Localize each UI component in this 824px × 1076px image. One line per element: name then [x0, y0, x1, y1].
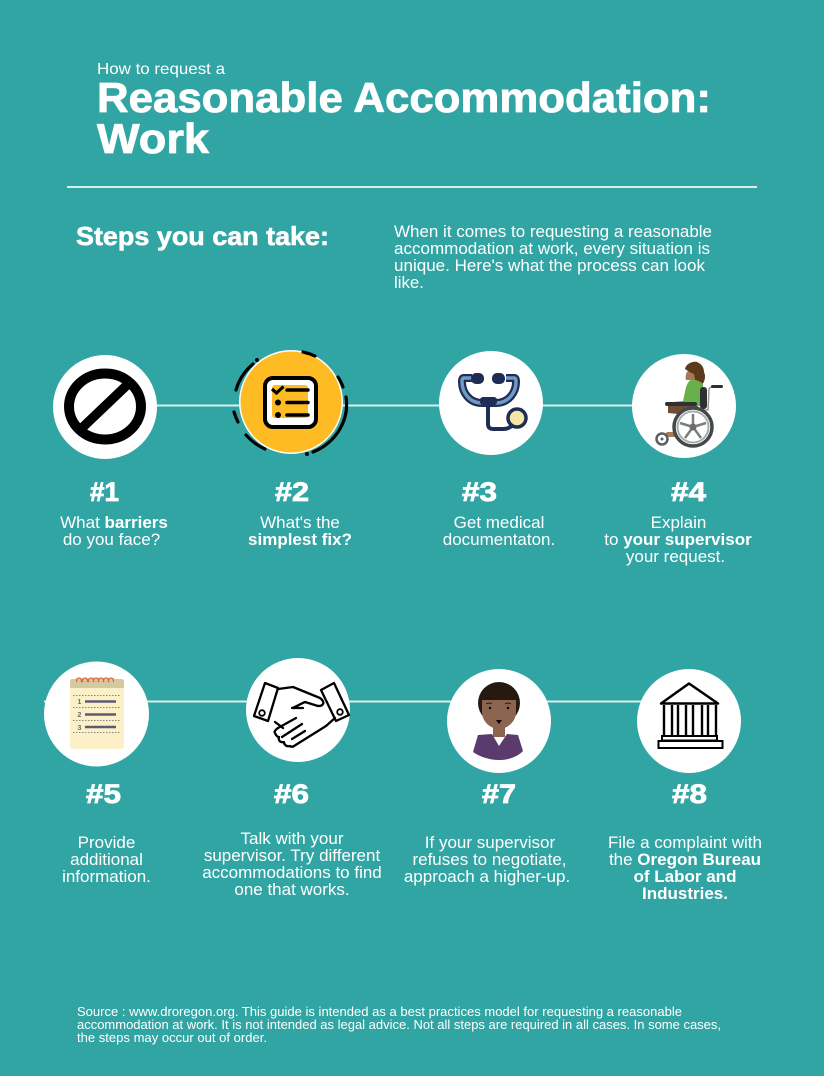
text: step 8	[608, 833, 762, 903]
text: step 4: Explain	[651, 513, 706, 532]
text: step 8: of Labor and	[634, 867, 736, 886]
subheading: steps you can take: Steps you can take:	[76, 221, 329, 251]
source note: the steps may occur out of order.	[77, 1030, 267, 1045]
text: step 1: What barriers	[60, 513, 168, 532]
text: step 8: Industries.	[642, 884, 728, 903]
main heading: Work	[97, 115, 210, 162]
main heading: Reasonable Accommodation:	[97, 74, 711, 121]
text: step 2: What's the	[260, 513, 340, 532]
text: step 6: accommodations to find	[202, 863, 382, 882]
text: step 3: Get medical	[454, 513, 544, 532]
text: step 7	[404, 833, 570, 886]
intro paragraph	[394, 222, 712, 292]
heading: step 2: #2	[275, 477, 309, 507]
text: step 7: If your supervisor	[425, 833, 556, 852]
text: step 7: refuses to negotiate,	[412, 850, 567, 869]
text: step 5: Provide	[78, 833, 135, 852]
text: step 8: the Oregon Bureau	[609, 850, 761, 869]
heading: step 5: #5	[86, 779, 121, 809]
icon: woman portrait	[447, 669, 551, 773]
text: step 6: supervisor. Try different	[204, 846, 380, 865]
icon: numbered notepad: 2	[78, 712, 82, 719]
intro paragraph: accommodation at work, every situation is	[394, 239, 710, 258]
icon: government building	[637, 669, 741, 773]
heading: step 3: #3	[462, 477, 497, 507]
icon: numbered notepad	[44, 662, 149, 766]
text: step 3: documentaton.	[443, 530, 555, 549]
text: step 6	[202, 829, 382, 899]
text: step 1	[60, 513, 168, 549]
icon: numbered notepad: 1	[78, 699, 82, 706]
text: step 5: information.	[62, 867, 151, 886]
text: step 2	[248, 513, 352, 549]
source note: Source : www.droregon.org. This guide is intended as a best practices model for requesting a reasonable	[77, 1004, 682, 1019]
icon: stethoscope	[439, 351, 543, 455]
intro paragraph: When it comes to requesting a reasonable	[394, 222, 712, 241]
intro paragraph: unique. Here's what the process can look	[394, 256, 705, 275]
text: step 3	[443, 513, 555, 549]
intro paragraph: like.	[394, 273, 424, 292]
text: step 6: one that works.	[234, 880, 350, 899]
heading: step 4: #4	[671, 477, 706, 507]
heading: step 7: #7	[482, 779, 516, 809]
heading: step 8: #8	[672, 779, 707, 809]
source note	[77, 1004, 721, 1045]
icon: person in wheelchair	[632, 354, 736, 458]
text: step 8: File a complaint with	[608, 833, 762, 852]
heading: step 1: #1	[90, 477, 119, 507]
text: step 5: additional	[70, 850, 143, 869]
text: step 6: Talk with your	[241, 829, 344, 848]
main heading	[97, 74, 711, 162]
icon: checklist on yellow circle	[234, 350, 347, 456]
text: step 1: do you face?	[63, 530, 160, 549]
text: step 4: your request.	[626, 547, 725, 566]
text: step 4	[604, 513, 752, 566]
icon: handshake	[246, 658, 350, 762]
heading: step 6: #6	[274, 779, 309, 809]
text: step 4: to your supervisor	[604, 530, 752, 549]
eyebrow text: How to request a	[97, 61, 225, 78]
icon: prohibition sign	[53, 355, 157, 459]
icon: numbered notepad: 3	[78, 725, 82, 732]
title block	[97, 61, 711, 162]
text: step 2: simplest fix?	[248, 530, 352, 549]
text: step 5	[62, 833, 151, 886]
text: step 7: approach a higher-up.	[404, 867, 570, 886]
source note: accommodation at work. It is not intended as legal advice. Not all steps are required in all cases. In some cases,	[77, 1017, 721, 1032]
